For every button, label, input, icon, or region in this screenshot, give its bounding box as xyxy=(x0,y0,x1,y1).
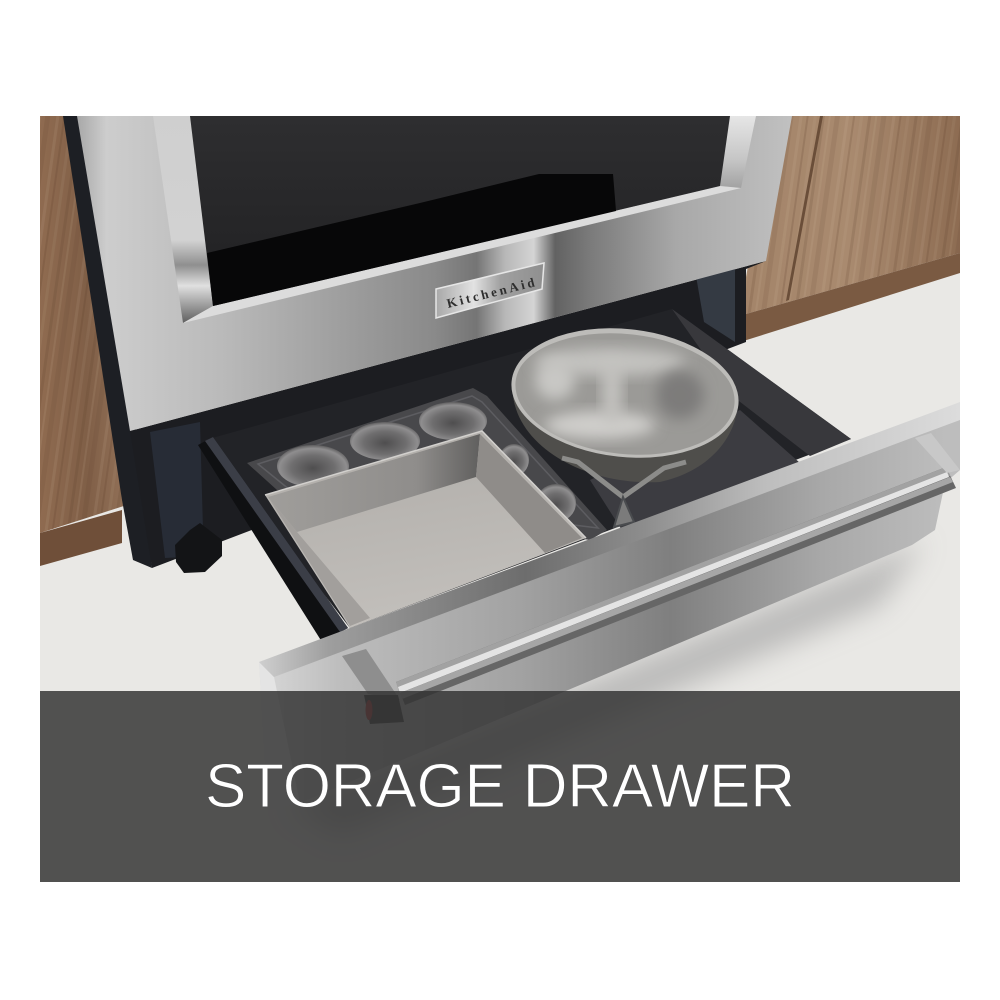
handle lower sheen xyxy=(400,477,953,699)
left handle bracket xyxy=(342,649,400,700)
handle highlight xyxy=(398,472,949,693)
photo: open storage drawer of a range xyxy=(40,116,960,882)
left wall of pan xyxy=(268,497,370,626)
dark range side edge xyxy=(63,116,152,568)
right handle bracket xyxy=(915,433,960,473)
oven door frame: left chrome xyxy=(153,116,213,323)
drawer floor xyxy=(590,410,800,535)
oven door frame: bottom strip xyxy=(183,186,741,323)
left wood cabinet xyxy=(40,116,124,566)
muffin tin xyxy=(247,388,607,540)
floor shadow under drawer xyxy=(566,543,922,691)
speckled blue range frame, right xyxy=(696,268,735,342)
drawer handle xyxy=(342,433,960,724)
handle shadow tone xyxy=(396,467,956,705)
pan handles xyxy=(562,458,686,497)
drawer right wall xyxy=(672,309,851,456)
pan inner bowl xyxy=(516,333,734,455)
handle body xyxy=(396,467,950,692)
right wall of pan xyxy=(476,434,582,553)
KitchenAid badge: KitchenAid xyxy=(445,274,537,311)
drawer front face xyxy=(274,420,960,742)
drawer left rail xyxy=(198,437,348,642)
right wood cabinet xyxy=(737,116,960,343)
oven window xyxy=(190,116,730,306)
pan rim highlight xyxy=(265,431,586,538)
KitchenAid badge xyxy=(436,263,544,318)
drawer top lip xyxy=(259,402,960,677)
red logo badge xyxy=(366,700,372,720)
caption band xyxy=(40,691,960,882)
oven rack reflection xyxy=(207,174,616,306)
under-oven dark cavity xyxy=(130,261,766,568)
drawer interior xyxy=(273,349,851,628)
oven door frame: right chrome xyxy=(720,116,756,188)
far wall of pan xyxy=(268,434,480,532)
steel frying pan xyxy=(505,317,745,527)
levelling foot xyxy=(175,523,222,573)
square baking pan xyxy=(265,431,586,628)
drawer left edge highlight xyxy=(259,662,277,691)
title: STORAGE DRAWER: STORAGE DRAWER xyxy=(205,752,795,821)
speckled blue range frame, left xyxy=(150,422,203,558)
pan outer wall xyxy=(513,396,738,482)
stainless oven front xyxy=(77,116,792,431)
infographic canvas xyxy=(40,116,960,882)
floor xyxy=(40,268,960,691)
